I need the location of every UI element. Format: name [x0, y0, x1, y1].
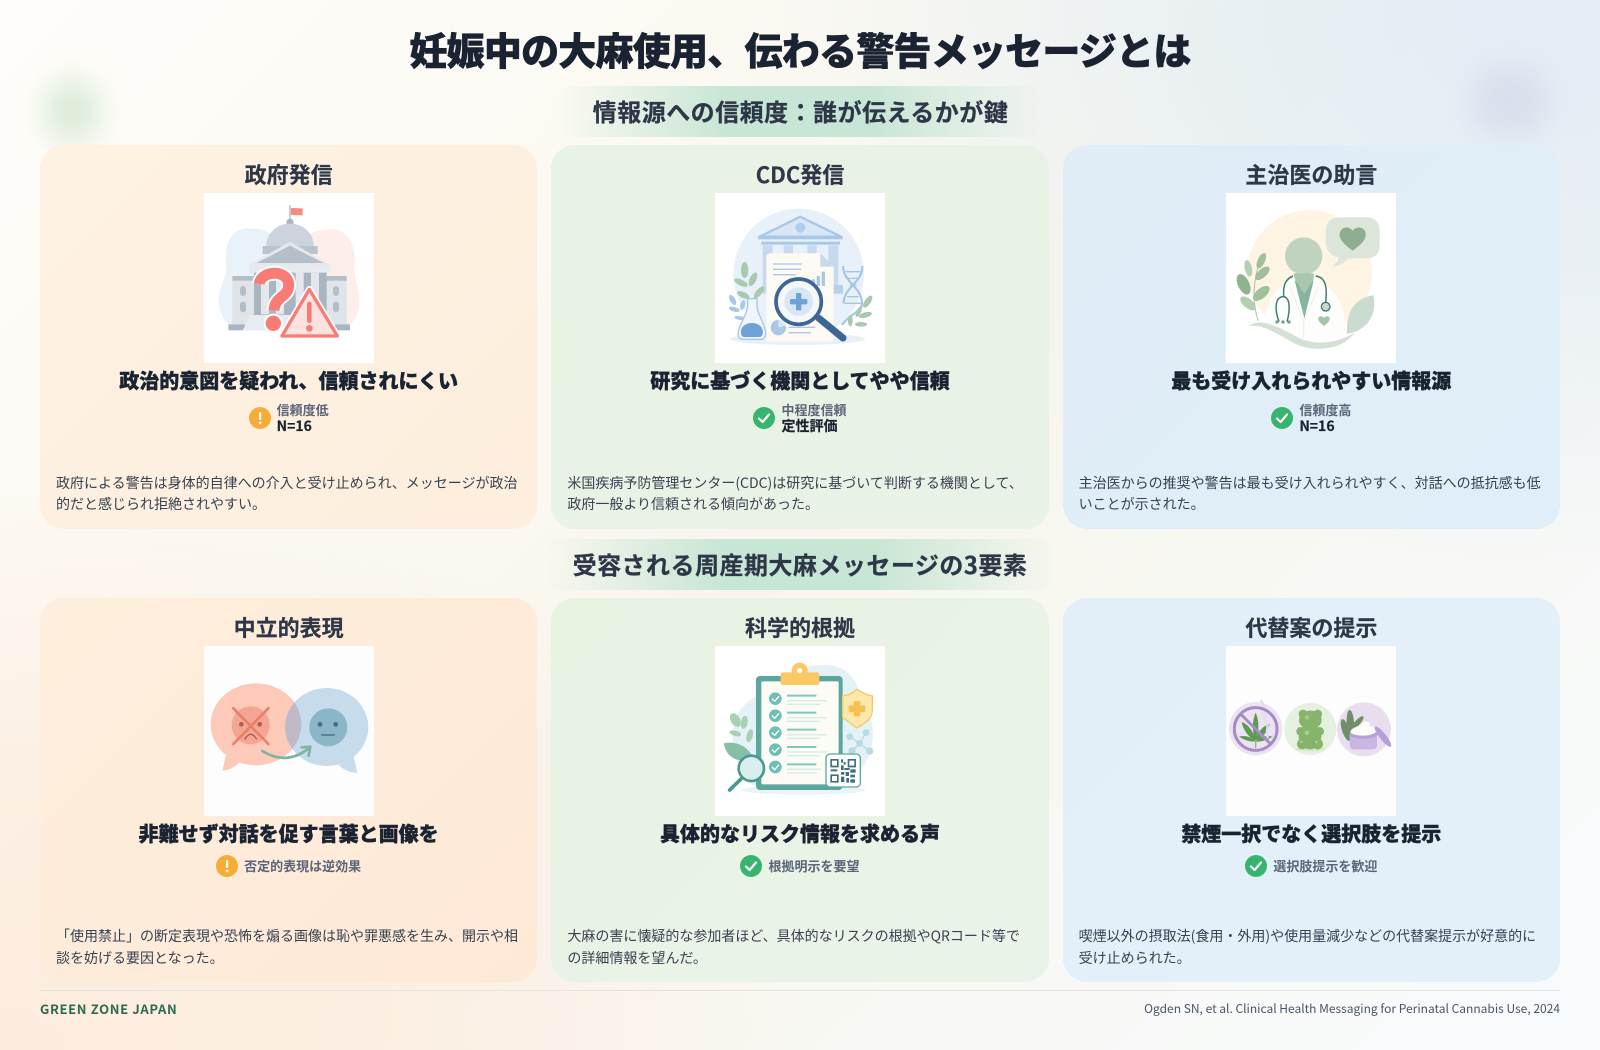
title: 妊娠中の大麻使用、伝わる警告メッセージとは — [409, 21, 1191, 76]
section heading: source trust — [556, 86, 1045, 137]
body text: neutral expression: 「使用禁止」の断定表現や恐怖を煽る画像は恥や罪悪感を生み、開示や相談を妨げる要因となった。 — [56, 926, 518, 968]
card heading: CDC: CDC発信 — [756, 158, 844, 190]
card heading: scientific evidence: 科学的根拠 — [745, 611, 855, 643]
panel: neutral expression — [40, 598, 537, 982]
icon: doctor with heart speech bubble — [1226, 193, 1396, 363]
key message: CDC: 研究に基づく機関としてやや信頼 — [650, 365, 950, 394]
icon: speech bubbles from angry to neutral — [204, 646, 374, 816]
icon: checklist clipboard, shield and QR code — [715, 646, 885, 816]
footer citation: Ogden SN, et al. Clinical Health Messaging for Perinatal Cannabis Use, 2024 — [1144, 1000, 1560, 1017]
card heading: government: 政府発信 — [245, 158, 333, 190]
key message: neutral expression: 非難せず対話を促す言葉と画像を — [139, 818, 439, 847]
panel: scientific evidence — [551, 598, 1049, 982]
body text: primary doctor: 主治医からの推奨や警告は最も受け入れられやすく、対話への抵抗感も低いことが示された。 — [1079, 473, 1541, 514]
card heading: neutral expression: 中立的表現 — [234, 611, 344, 643]
panel: alternatives — [1063, 598, 1560, 982]
body text: scientific evidence: 大麻の害に懐疑的な参加者ほど、具体的なリスクの根拠やQRコード等での詳細情報を望んだ。 — [567, 926, 1020, 968]
badge: high trust: 信頼度高 — [1299, 400, 1351, 419]
card heading: alternatives: 代替案の提示 — [1245, 611, 1377, 643]
badge: low trust — [249, 400, 329, 436]
card heading: primary doctor: 主治医の助言 — [1245, 158, 1377, 190]
badge: evidence requested: 根拠明示を要望 — [768, 856, 860, 875]
badge: options welcomed — [1245, 855, 1378, 877]
badge: moderate trust: 定性評価 — [781, 416, 837, 436]
footer brand: GREEN ZONE JAPAN — [40, 999, 177, 1018]
section heading: three elements: 受容される周産期大麻メッセージの3要素 — [573, 546, 1027, 581]
badge: negative expressions backfire — [216, 855, 361, 877]
section heading: three elements — [545, 539, 1055, 590]
badge: options welcomed: 選択肢提示を歓迎 — [1273, 856, 1377, 875]
badge: moderate trust: 中程度信頼 — [781, 400, 846, 419]
icon: no smoking leaf, gummy bear and cream jar — [1226, 646, 1396, 816]
key message: primary doctor: 最も受け入れられやすい情報源 — [1171, 365, 1451, 394]
key message: scientific evidence: 具体的なリスク情報を求める声 — [660, 818, 940, 847]
icon: institution, document and magnifier — [715, 193, 885, 363]
badge: negative expressions backfire: 否定的表現は逆効果 — [244, 856, 361, 875]
icon: capitol with question mark and warning — [204, 193, 374, 363]
body text: alternatives: 喫煙以外の摂取法(食用・外用)や使用量減少などの代替案提示が好意的に受け止められた。 — [1079, 926, 1536, 968]
badge: low trust: N=16 — [277, 416, 312, 436]
panel: CDC — [551, 145, 1049, 529]
body text: CDC: 米国疾病予防管理センター(CDC)は研究に基づいて判断する機関として、政府一般より信頼される傾向があった。 — [567, 473, 1023, 514]
badge: high trust — [1271, 400, 1351, 436]
badge: evidence requested — [740, 855, 860, 877]
section heading: source trust: 情報源への信頼度：誰が伝えるかが鍵 — [593, 93, 1008, 128]
key message: government: 政治的意図を疑われ、信頼されにくい — [119, 365, 458, 394]
body text: government: 政府による警告は身体的自律への介入と受け止められ、メッセージが政治的だと感じられ拒絶されやすい。 — [56, 473, 517, 514]
badge: moderate trust — [753, 400, 846, 436]
key message: alternatives: 禁煙一択でなく選択肢を提示 — [1181, 818, 1441, 847]
badge: high trust: N=16 — [1299, 416, 1335, 436]
badge: low trust: 信頼度低 — [277, 400, 329, 419]
panel: government — [40, 145, 537, 529]
panel: primary doctor — [1063, 145, 1560, 529]
